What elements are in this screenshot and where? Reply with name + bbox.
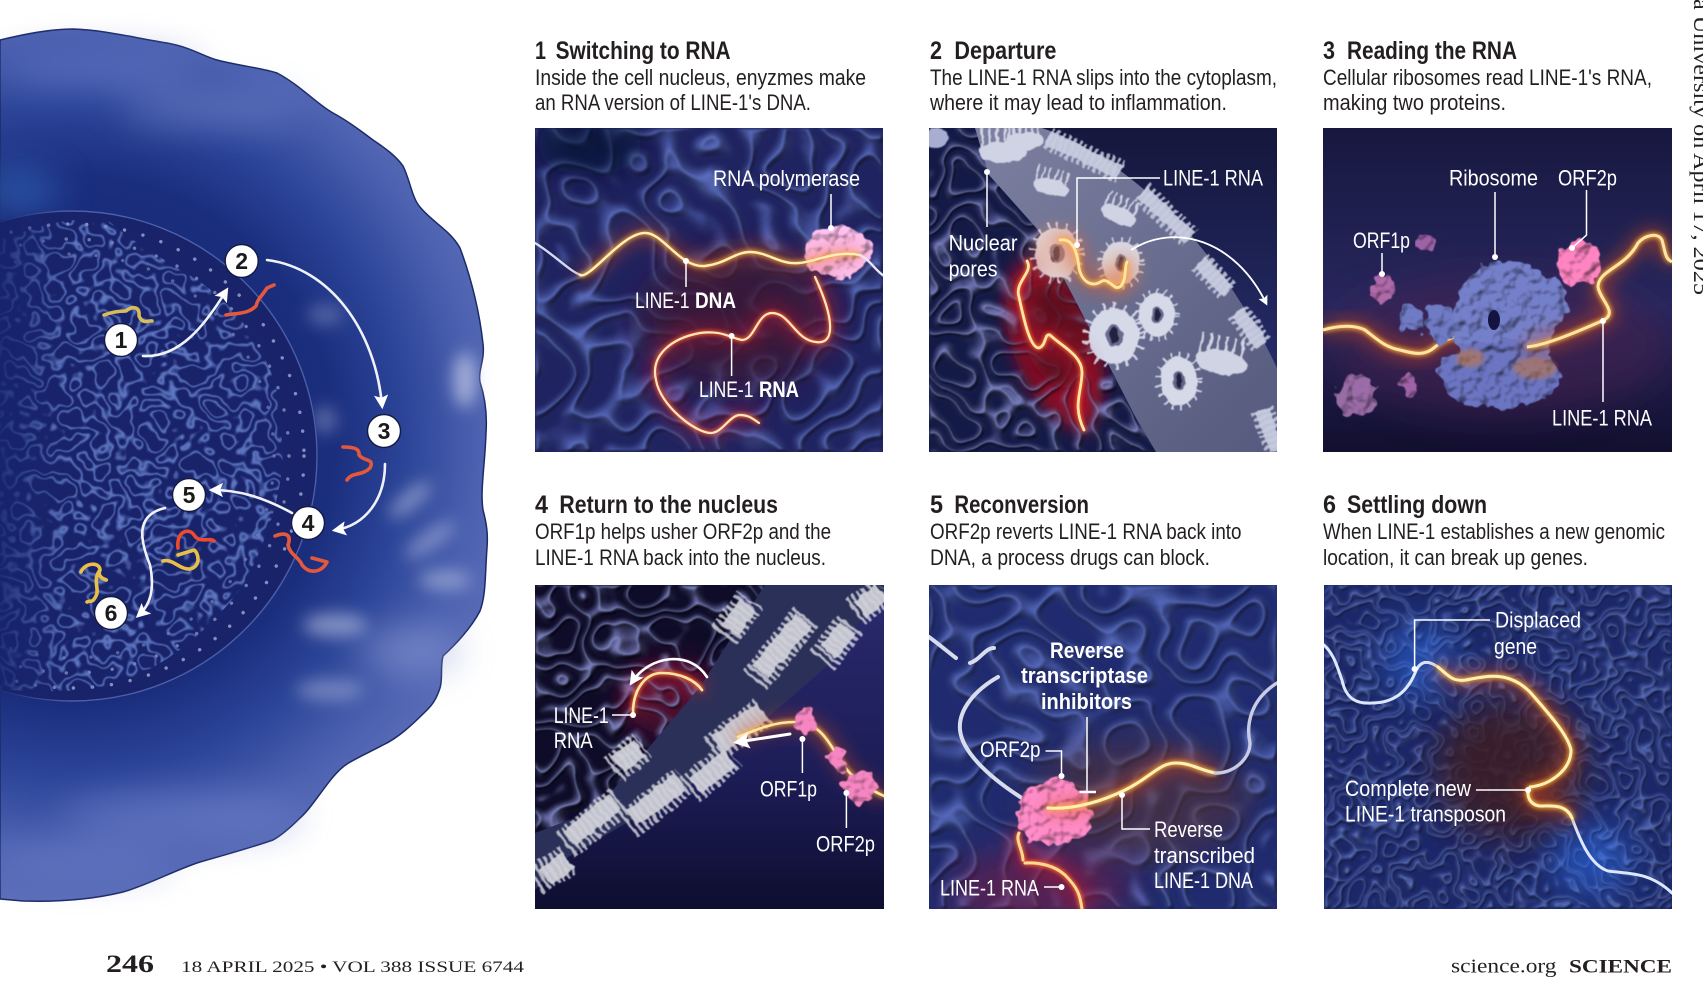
body text 1: an RNA version of LINE-1's DNA. bbox=[535, 90, 811, 115]
nuclear speckles bbox=[0, 224, 304, 688]
body text 4: ORF1p helps usher ORF2p and the bbox=[535, 519, 831, 544]
labels 5: LINE-1 DNA bbox=[1154, 868, 1253, 893]
image 5 bbox=[929, 585, 1277, 930]
displaced gene strands bbox=[1324, 645, 1672, 893]
panel 5: Reconversion bbox=[929, 491, 1277, 930]
labels 4: ORF2p bbox=[816, 832, 875, 857]
body text 6 bbox=[1323, 519, 1665, 570]
footer left: page and issue: 246 bbox=[106, 951, 154, 978]
footer right: journal: science.org bbox=[1451, 956, 1556, 978]
labels 3: ORF2p bbox=[1558, 166, 1617, 191]
panel 6: Settling down bbox=[1323, 491, 1672, 909]
body text 3 bbox=[1323, 65, 1652, 115]
body text 5: ORF2p reverts LINE-1 RNA back into bbox=[930, 519, 1242, 544]
image 6 bbox=[1324, 585, 1672, 909]
footer left: page and issue: 18 APRIL 2025 • VOL 388 ISSUE 6744 bbox=[181, 959, 524, 976]
LINE-1 RNA strand, right bbox=[1527, 235, 1672, 347]
image 1 bbox=[535, 115, 884, 452]
body text 4: LINE-1 RNA back into the nucleus. bbox=[535, 545, 826, 570]
chromatin tangle bbox=[0, 220, 282, 692]
labels 1: DNA bbox=[695, 288, 736, 313]
footer right: journal: SCIENCE bbox=[1569, 956, 1672, 978]
labels 2 bbox=[949, 166, 1263, 282]
heading 5: 5 bbox=[930, 491, 943, 519]
labels 1: RNA polymerase bbox=[713, 166, 860, 191]
labels 3 bbox=[1353, 166, 1652, 431]
labels 5: ORF2p bbox=[980, 737, 1040, 762]
heading 2: Departure bbox=[954, 37, 1056, 65]
labels 2: Nuclear bbox=[949, 231, 1018, 256]
heading 1: 1 bbox=[535, 37, 546, 65]
nuclear envelope band bbox=[535, 585, 884, 890]
movement arrows bbox=[632, 659, 790, 742]
LINE-1 squiggles bbox=[81, 285, 371, 602]
reverse transcribed DNA strand bbox=[1048, 683, 1277, 808]
labels 6: gene bbox=[1494, 634, 1537, 659]
labels 5 bbox=[940, 638, 1255, 901]
step badges: 1 bbox=[115, 327, 128, 353]
LINE-1 RNA strands bbox=[633, 673, 884, 796]
body text 5: DNA, a process drugs can block. bbox=[930, 545, 1210, 570]
image 3 bbox=[1323, 128, 1672, 452]
heading 6: Settling down bbox=[1347, 491, 1487, 519]
labels 4: LINE-1 bbox=[554, 703, 609, 728]
labels 5: transcribed bbox=[1154, 843, 1255, 868]
footer right: journal bbox=[1451, 956, 1672, 978]
LINE-1 RNA strand bbox=[655, 277, 830, 433]
panel 2: Departure bbox=[924, 37, 1277, 452]
envelope edge crowns bbox=[1048, 138, 1277, 450]
body text 3: making two proteins. bbox=[1323, 90, 1506, 115]
labels 6: LINE-1 transposon bbox=[1345, 802, 1506, 827]
body text 1: Inside the cell nucleus, enyzmes make bbox=[535, 65, 866, 90]
labels 1 bbox=[635, 166, 860, 402]
panel 3: Reading the RNA bbox=[1323, 37, 1672, 452]
ORF2p enzyme bbox=[1016, 781, 1092, 845]
panel 1: Switching to RNA bbox=[535, 37, 884, 452]
LINE-1 RNA strand bbox=[1018, 240, 1127, 430]
labels 5: Reverse bbox=[1154, 817, 1223, 842]
labels 4: RNA bbox=[554, 728, 593, 753]
body text 3: Cellular ribosomes read LINE-1's RNA, bbox=[1323, 65, 1652, 90]
body text 2: where it may lead to inflammation. bbox=[929, 90, 1227, 115]
LINE-1 DNA strand bbox=[535, 233, 884, 276]
labels 6: Complete new bbox=[1345, 776, 1471, 801]
image 2 bbox=[924, 128, 1277, 452]
envelope crowns bbox=[535, 590, 884, 880]
heading 4: Return to the nucleus bbox=[559, 491, 778, 519]
proteins bbox=[1336, 233, 1601, 417]
labels 5: transcriptase bbox=[1021, 663, 1148, 688]
body text 4 bbox=[535, 519, 831, 570]
labels 6: Displaced bbox=[1495, 608, 1581, 633]
body text 5 bbox=[930, 519, 1242, 570]
ribosome bbox=[1400, 260, 1568, 409]
labels 4 bbox=[554, 703, 875, 857]
body text 6: location, it can break up genes. bbox=[1323, 545, 1588, 570]
LINE-1 RNA strand, left bbox=[1323, 326, 1469, 353]
heading 3: 3 bbox=[1323, 37, 1335, 65]
labels 5: LINE-1 RNA bbox=[940, 876, 1039, 901]
footer left: page and issue bbox=[106, 951, 524, 978]
nucleus side bbox=[535, 585, 775, 835]
heading 6: 6 bbox=[1323, 491, 1336, 519]
LINE-1 RNA strand bbox=[929, 637, 1082, 909]
heading 5: Reconversion bbox=[954, 491, 1089, 519]
labels 6 bbox=[1345, 608, 1581, 827]
cell body bbox=[0, 29, 487, 901]
step badges bbox=[94, 244, 400, 630]
body text 1 bbox=[535, 65, 866, 115]
labels 1: LINE-1 bbox=[635, 288, 690, 313]
step badges: 5 bbox=[183, 482, 196, 508]
labels 2: LINE-1 RNA bbox=[1163, 166, 1263, 191]
labels 4: ORF1p bbox=[760, 777, 817, 802]
nucleus side bbox=[929, 128, 1159, 452]
labels 1: RNA bbox=[759, 377, 799, 402]
labels 2: pores bbox=[949, 257, 998, 282]
body text 2 bbox=[929, 65, 1277, 115]
labels 3: ORF1p bbox=[1353, 228, 1410, 253]
cell illustration bbox=[0, 29, 487, 901]
exit arrow bbox=[1131, 237, 1266, 303]
nucleus bbox=[0, 205, 318, 705]
heading 3: Reading the RNA bbox=[1347, 37, 1517, 65]
heading 2: 2 bbox=[930, 37, 942, 65]
panel 4: Return to the nucleus bbox=[535, 491, 884, 909]
labels 5: Reverse bbox=[1050, 638, 1124, 663]
pink proteins bbox=[792, 710, 877, 802]
labels 3: LINE-1 RNA bbox=[1552, 406, 1652, 431]
step badges: 2 bbox=[235, 248, 248, 274]
step badges: 3 bbox=[378, 418, 390, 444]
step badges: 4 bbox=[302, 510, 315, 536]
heading 4: 4 bbox=[535, 491, 548, 519]
heading 1: Switching to RNA bbox=[556, 37, 731, 65]
nuclear envelope band bbox=[975, 128, 1277, 452]
new LINE-1 transposon bbox=[1438, 667, 1572, 818]
image 4 bbox=[535, 585, 884, 909]
nuclear pores bbox=[924, 128, 1249, 406]
RNA polymerase blob bbox=[805, 227, 871, 277]
labels 3: Ribosome bbox=[1449, 166, 1538, 191]
labels 1: LINE-1 bbox=[699, 377, 754, 402]
body text 2: The LINE-1 RNA slips into the cytoplasm, bbox=[930, 65, 1277, 90]
arrows between steps bbox=[139, 260, 385, 615]
step badges: 6 bbox=[105, 600, 117, 626]
labels 5: inhibitors bbox=[1041, 689, 1132, 714]
